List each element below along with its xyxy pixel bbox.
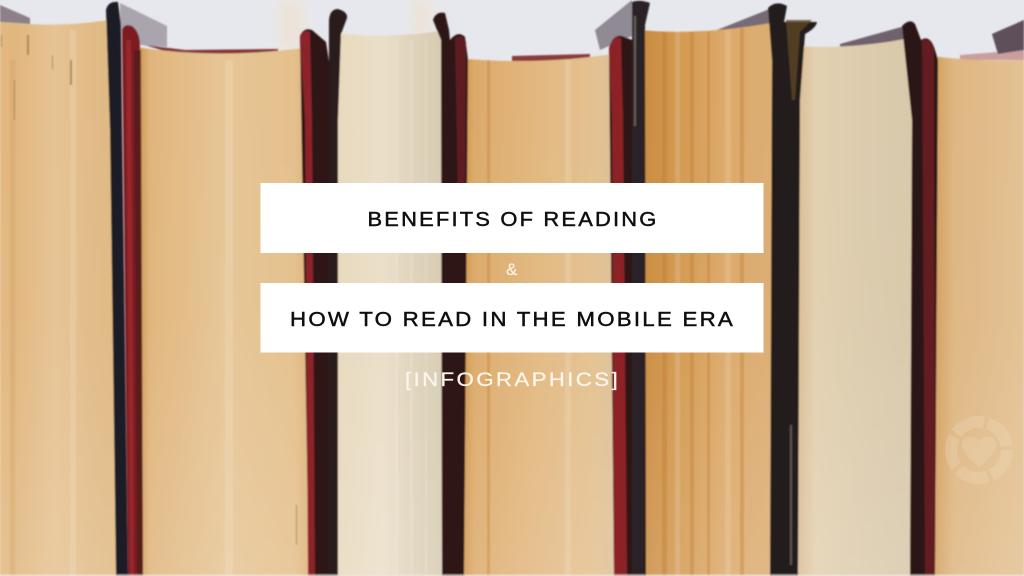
ampersand: & xyxy=(506,260,518,279)
heading: how to read in the mobile era: HOW TO READ IN THE MOBILE ERA xyxy=(290,309,735,331)
page edge streaks xyxy=(10,28,744,576)
spine group 6 xyxy=(902,21,938,576)
infographics tag: [INFOGRAPHICS] xyxy=(405,370,620,391)
spine group 5 xyxy=(768,3,817,576)
heading: benefits of reading: BENEFITS OF READING xyxy=(368,209,658,231)
spine group 3 xyxy=(433,13,468,576)
spine group 1 xyxy=(106,2,128,576)
spine group 2 xyxy=(300,29,338,576)
title box: benefits of reading xyxy=(260,183,764,253)
last book cover xyxy=(992,20,1024,54)
book covers behind pages xyxy=(0,5,30,24)
title box: how to read in the mobile era xyxy=(260,283,764,352)
icon: heart logo watermark xyxy=(951,422,1007,478)
wall behind the books xyxy=(0,0,1024,120)
spine group 4 xyxy=(609,30,646,576)
book page blocks xyxy=(0,20,122,576)
bottom edge strip xyxy=(0,574,1024,576)
